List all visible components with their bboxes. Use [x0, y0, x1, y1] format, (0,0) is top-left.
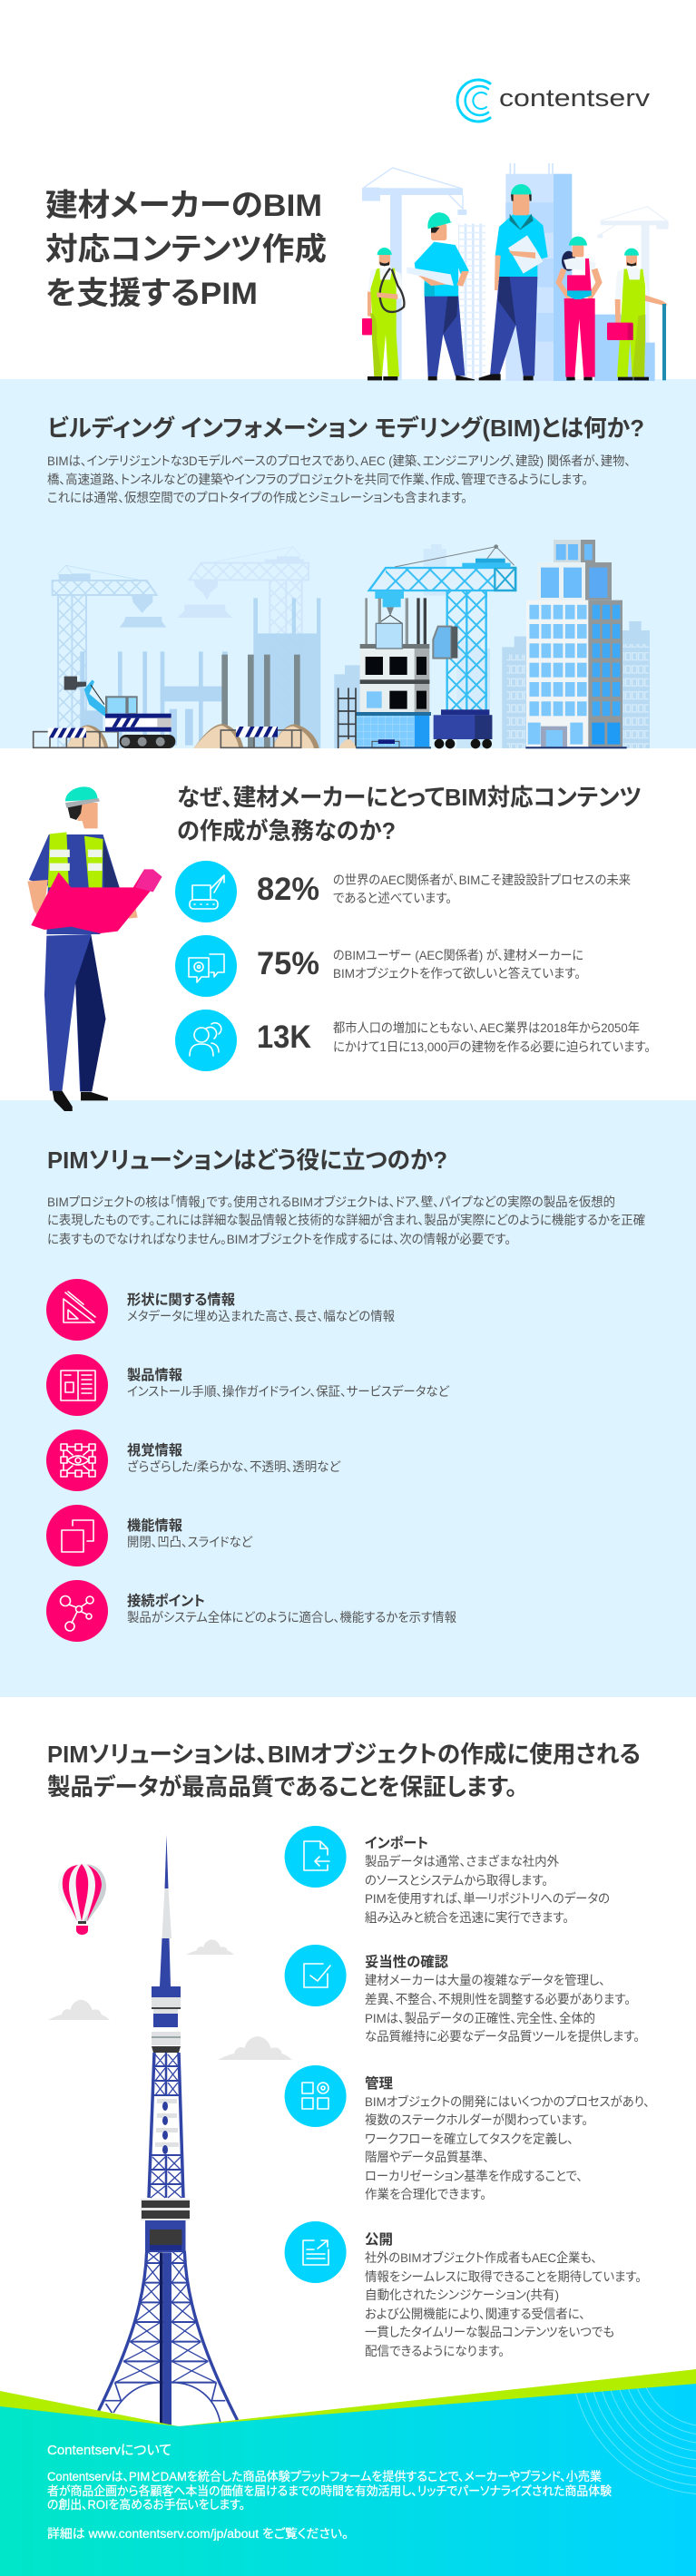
mid section gray bands — [155, 2099, 179, 2154]
item: publication: 一貫したタイムリーな製品コンテンツをいつでも — [365, 2325, 614, 2339]
text block: BIM definition: BIMは、インテリジェントな3Dモデルベースのプロセスであり、AEC (建築、エンジニアリング、建設) 関係者が、建物、 — [47, 454, 631, 468]
heading: why urgent — [177, 784, 642, 844]
item: publication: および公開機能により、関連する受信者に、 — [365, 2307, 585, 2321]
icon: people — [190, 1023, 221, 1056]
text block: BIM definition: 橋、高速道路、トンネルなどの建築やインフラのプロジェクトを共同で作業、作成、管理できるようにします。 — [47, 472, 588, 486]
icon: network eye — [61, 1444, 95, 1477]
item: management: ローカリゼーション基準を作成することで、 — [365, 2169, 583, 2183]
tower crane — [369, 544, 515, 748]
item: validation: 妥当性の確認 — [365, 1953, 448, 1970]
stat: 13K: 13K — [257, 1020, 311, 1055]
item: publication: 公開 — [365, 2231, 393, 2248]
text block: BIM project core: BIMプロジェクトの核は「情報」です。使用されるBIMオブジェクトは、ドア、壁、パイプなどの実際の製品を仮想的 — [47, 1195, 615, 1209]
item: import: 組み込みと統合を迅速に実行できます。 — [365, 1910, 569, 1925]
worker: tall foreman with papers — [479, 184, 548, 380]
item: validation: 建材メーカーは大量の複雑なデータを管理し、 — [365, 1973, 605, 1987]
stat: 82% — [175, 861, 631, 922]
illustration: Tokyo tower — [98, 1835, 238, 2425]
worker: right with toolbox and cane — [607, 249, 667, 380]
heading: how PIM helps: PIMソリューションはどう役に立つのか? — [47, 1147, 447, 1174]
item: publication: 社外のBIMオブジェクト作成者もAEC企業も、 — [365, 2250, 597, 2265]
footer: company info — [0, 2369, 696, 2576]
office tower — [525, 540, 627, 748]
item: publication: 自動化されたシンジケーション(共有) — [365, 2288, 559, 2302]
item: validation: 差異、不整合、不規則性を調整する必要があります。 — [365, 1992, 631, 2006]
text block: BIM project core: に表現したものです。これには詳細な製品情報と技術的な詳細が含まれ、製品が実際にどのように機能するかを正確 — [47, 1213, 645, 1227]
title — [45, 189, 327, 311]
heading: PIM guarantees quality: 製品データが最高品質であることを保証します。 — [47, 1773, 517, 1800]
item: function info: 開閉、凹凸、スライドなど — [127, 1535, 253, 1549]
item: validation — [285, 1945, 640, 2044]
icon: hot air balloon — [58, 1864, 106, 1935]
title: 対応コンテンツ作成 — [45, 232, 327, 267]
footer text block: の創出、ROIを高めるお手伝いをします。 — [47, 2497, 245, 2512]
title: 建材メーカーのBIM — [45, 189, 322, 223]
heading: PIM guarantees quality — [47, 1741, 641, 1800]
icon: document publish — [303, 2240, 328, 2265]
title: を支援するPIM — [45, 277, 258, 311]
text block: BIM project core: に表すものでなければなりません。BIMオブジェクトを作成するには、次の情報が必要です。 — [47, 1232, 511, 1246]
item: function info — [46, 1505, 253, 1566]
item: connection points: 製品がシステム全体にどのように適合し、機能するかを示す情報 — [127, 1610, 456, 1625]
icon: overlapping squares — [62, 1520, 93, 1552]
text block: BIM project core — [47, 1195, 645, 1246]
heading: what is BIM: ビルディング インフォメーション モデリング(BIM)とは何か? — [47, 415, 644, 442]
item: import: インポート — [365, 1835, 428, 1851]
stat: 75%: 75% — [257, 946, 319, 981]
upper lattice — [149, 2053, 183, 2198]
item: management: BIMオブジェクトの開発にはいくつかのプロセスがあり、 — [365, 2094, 650, 2109]
illustration: construction workers — [362, 163, 669, 381]
tower spire and decks — [152, 1835, 181, 2053]
stat: 13K: 都市人口の増加にともない、AEC業界は2018年から2050年 — [333, 1020, 640, 1035]
excavator — [64, 677, 175, 748]
item: geometry info: メタデータに埋め込まれた高さ、長さ、幅などの情報 — [127, 1309, 395, 1323]
footer text block: Contentservは、PIMとDAMを統合した商品体験プラットフォームを提供することで、メーカーやブランド、小売業 — [47, 2469, 602, 2483]
illustration: construction site left — [34, 547, 320, 748]
steel columns — [221, 655, 300, 748]
pale background buildings — [334, 544, 650, 748]
illustration: man holding blueprint — [27, 786, 162, 1111]
background crane left — [53, 565, 166, 748]
pale building skeleton — [80, 598, 320, 748]
footer text block — [47, 2469, 612, 2541]
barriers — [34, 730, 301, 747]
item: management: 複数のステークホルダーが関わっています。 — [365, 2113, 588, 2127]
worker: with rolled plans — [407, 212, 475, 380]
footer text block: 詳細は www.contentserv.com/jp/about をご覧ください。 — [47, 2527, 348, 2541]
heading: PIM guarantees quality: PIMソリューションは、BIMオブジェクトの作成に使用される — [47, 1741, 641, 1768]
icon: crane — [190, 875, 224, 909]
observation platform — [141, 2199, 190, 2252]
item: validation: PIMは、製品データの正確性、完全性、全体的 — [365, 2011, 595, 2025]
item: validation: な品質維持に必要なデータ品質ツールを提供します。 — [365, 2029, 640, 2044]
icon: set square — [64, 1292, 95, 1322]
heading: why urgent: なぜ、建材メーカーにとってBIM対応コンテンツ — [177, 784, 642, 811]
stat: 75%: のBIMユーザー (AEC関係者) が、建材メーカーに — [333, 948, 583, 962]
icon: grid with gear — [302, 2083, 328, 2109]
item: import: 製品データは通常、さまざまな社内外 — [365, 1854, 559, 1869]
text block: BIM definition — [47, 454, 631, 504]
stat: 13K — [175, 1010, 651, 1071]
item: publication — [285, 2221, 642, 2358]
panel: BIM definition background — [0, 379, 696, 748]
sand mounds — [66, 724, 319, 748]
lower tower legs — [98, 2251, 238, 2425]
logo: contentserv: contentserv — [499, 84, 651, 112]
footer heading: Contentservについて — [47, 2443, 172, 2458]
item: publication: 情報をシームレスに取得できることを期待しています。 — [365, 2269, 642, 2284]
illustration: construction site right — [334, 540, 650, 748]
icon: nodes — [60, 1596, 93, 1631]
worker: left with cable — [362, 248, 404, 380]
item: management — [285, 2065, 650, 2201]
item: import: のソースとシステムから取得します。 — [365, 1873, 548, 1888]
item: product info: インストール手順、操作ガイドライン、保証、サービスデータなど — [127, 1384, 450, 1399]
stat: 75% — [175, 935, 583, 997]
worker: woman in pink overalls — [555, 237, 603, 380]
item: product info: 製品情報 — [127, 1366, 182, 1383]
icon: checkbox — [304, 1964, 330, 1987]
item: connection points: 接続ポイント — [127, 1593, 205, 1609]
background crane right — [178, 547, 309, 748]
item: management: ワークフローを確立してタスクを定義し、 — [365, 2132, 573, 2146]
item: management: 階層やデータ品質基準、 — [365, 2150, 489, 2164]
icon: document import — [304, 1841, 329, 1870]
icon: book — [61, 1371, 95, 1400]
stat: 13K: にかけて1日に13,000戸の建物を作る必要に迫られています。 — [333, 1039, 651, 1054]
item: visual info — [46, 1429, 341, 1491]
item: product info — [46, 1354, 450, 1416]
text block: BIM definition: これには通常、仮想空間でのプロトタイプの作成とシミュレーションも含まれます。 — [47, 490, 467, 504]
footer text block: 者が商品企画から各顧客へ本当の価値を届けるまでの時間を有効活用し、リッチでパーソナライズされた商品体験 — [47, 2483, 612, 2498]
item: visual info: 視覚情報 — [127, 1441, 182, 1459]
item: connection points — [46, 1580, 456, 1642]
item: import — [285, 1826, 610, 1925]
item: geometry info — [46, 1279, 395, 1341]
clouds — [48, 1939, 292, 2060]
stat: 82%: であると述べています。 — [333, 891, 452, 905]
stat: 75%: BIMオブジェクトを作って欲しいと答えています。 — [333, 966, 581, 981]
item: import: PIMを使用すれば、単一リポジトリへのデータの — [365, 1891, 610, 1906]
stat: 82%: 82% — [257, 872, 319, 907]
item: visual info: ざらざらした/柔らかな、不透明、透明など — [127, 1459, 341, 1474]
item: publication: 配信できるようになります。 — [365, 2344, 505, 2358]
item: geometry info: 形状に関する情報 — [127, 1291, 235, 1308]
stat: 82%: の世界のAEC関係者が、BIMこそ建設設計プロセスの未来 — [333, 873, 631, 887]
item: management: 作業を合理化できます。 — [365, 2187, 486, 2201]
item: management: 管理 — [365, 2074, 393, 2092]
item: function info: 機能情報 — [127, 1517, 182, 1534]
icon: chat with gear — [189, 954, 224, 982]
building under construction — [338, 598, 457, 748]
heading: why urgent: の作成が急務なのか? — [177, 817, 396, 844]
panel: PIM usefulness background — [0, 1100, 696, 1697]
logo: contentserv — [457, 80, 651, 122]
